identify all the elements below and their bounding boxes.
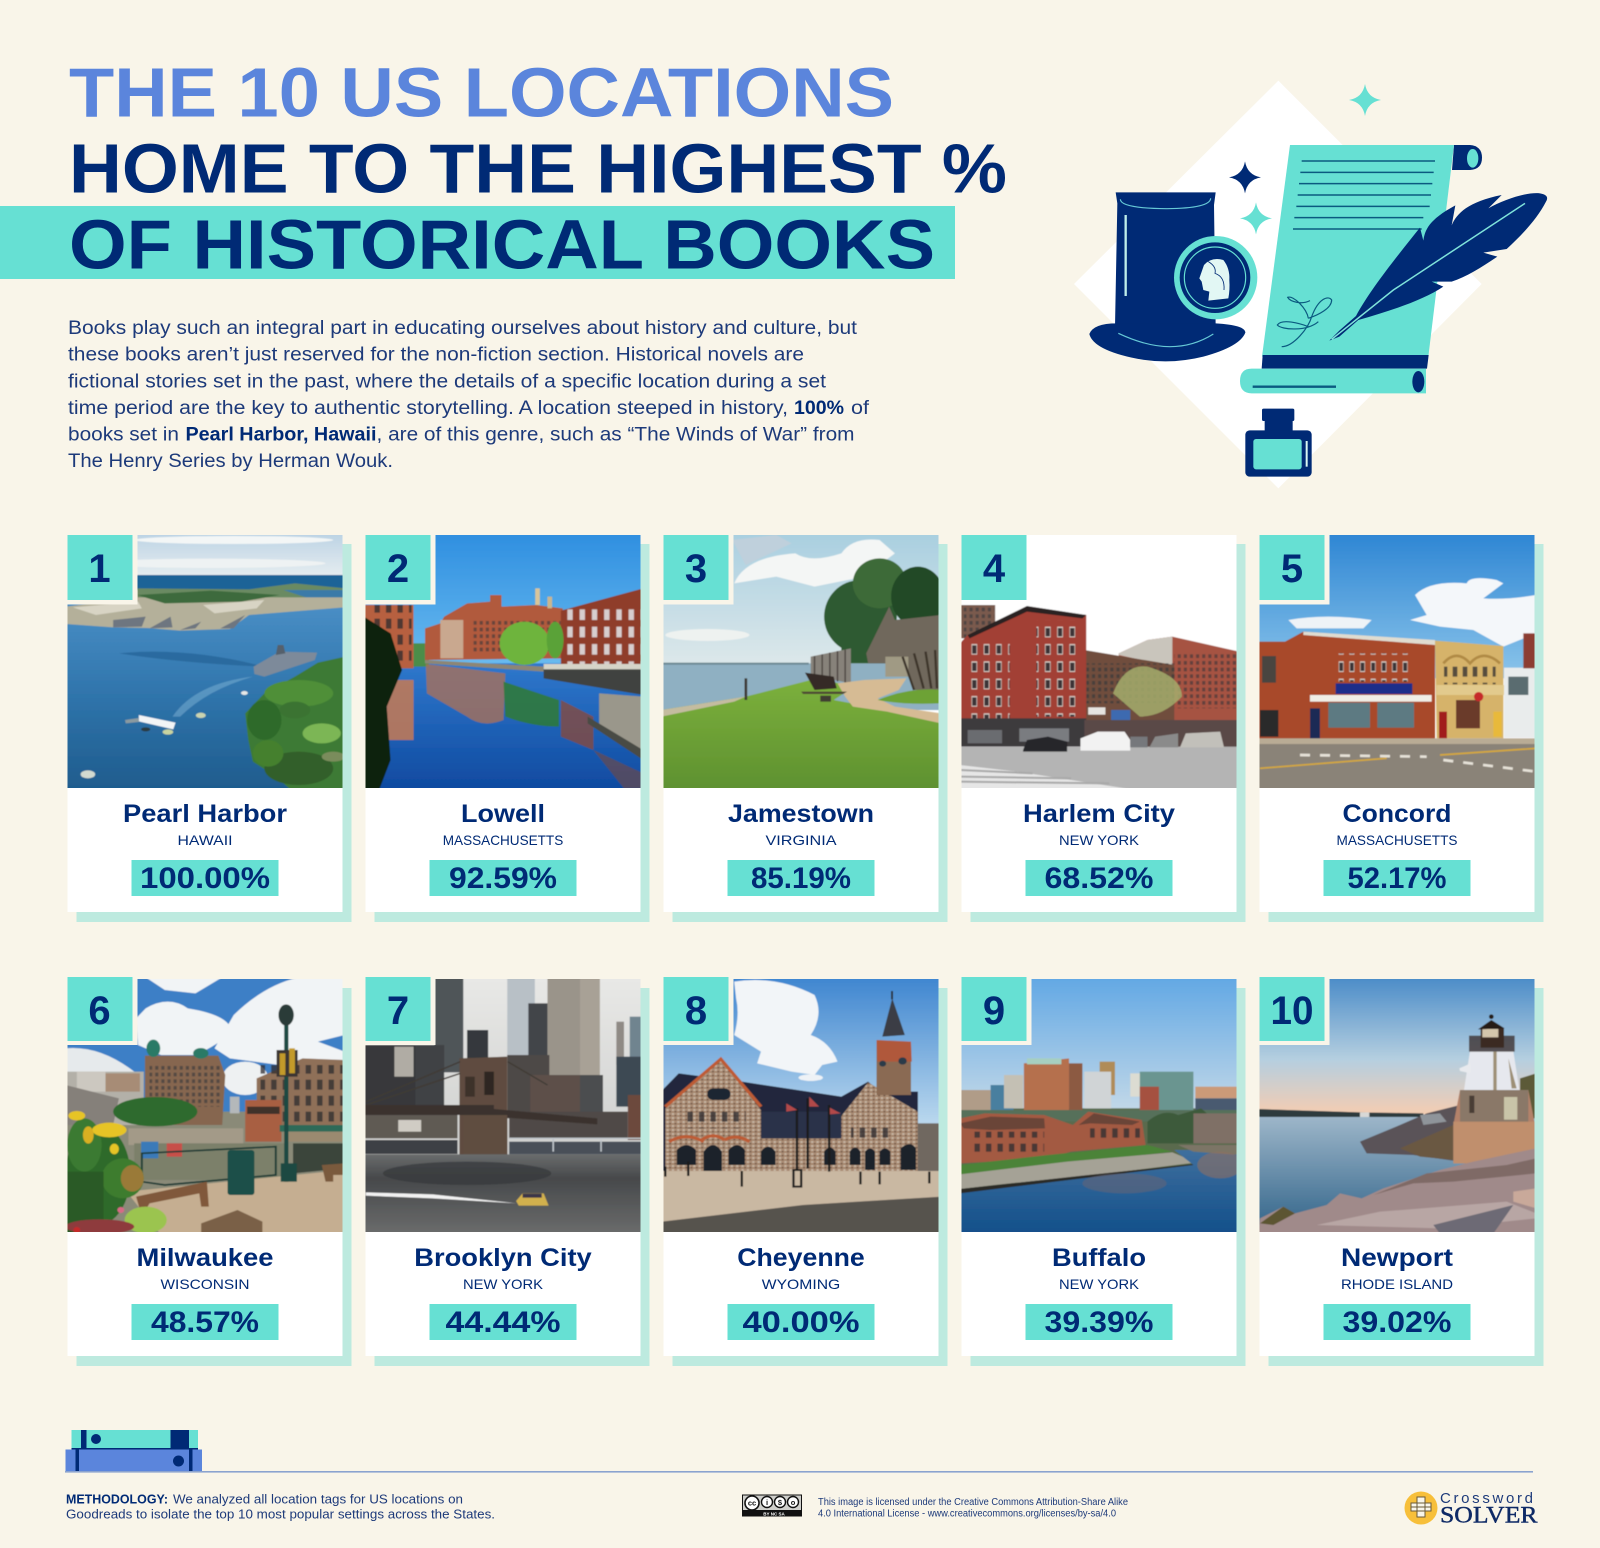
percentage pill — [728, 860, 874, 896]
card 7: Brooklyn City — [364, 977, 650, 1366]
footer line — [65, 1471, 1533, 1473]
rank badge 5 — [1260, 535, 1330, 604]
card 10: Newport — [1258, 977, 1544, 1366]
percentage pill — [1026, 860, 1172, 896]
city label: Concord — [1342, 800, 1452, 828]
icon: stacked books — [66, 1430, 202, 1471]
logo: Crossword Solver — [1404, 1490, 1538, 1528]
rank badge 4: 4 — [983, 547, 1006, 591]
rank badge 6 — [68, 977, 138, 1045]
percentage pill: 52.17% — [1348, 862, 1446, 895]
intro text block: fictional stories set in the past, where the details of a specific location during a set — [68, 371, 827, 392]
card 9: Buffalo — [960, 977, 1246, 1366]
state label: VIRGINIA — [766, 832, 837, 848]
rank badge 8 — [664, 977, 734, 1045]
intro text block — [68, 318, 870, 472]
city label: Pearl Harbor — [123, 800, 287, 828]
percentage pill — [1324, 1304, 1470, 1340]
title — [0, 54, 1007, 284]
percentage pill: 92.59% — [449, 862, 557, 895]
intro text block: these books aren’t just reserved for the non-fiction section. Historical novels are — [68, 345, 804, 366]
card 2: Lowell — [364, 533, 650, 922]
rank badge 1: 1 — [88, 547, 111, 591]
logo: Crossword Solver: SOLVER — [1440, 1503, 1538, 1528]
icon: ink bottle — [1245, 409, 1312, 477]
rank badge 2: 2 — [387, 547, 409, 591]
icon: creative commons badge: o — [791, 1498, 796, 1507]
intro text block: 100% — [794, 398, 844, 419]
icon: creative commons badge — [742, 1495, 802, 1516]
percentage pill: 39.39% — [1044, 1306, 1154, 1339]
illustration: hat, scroll, quill, ink — [1074, 80, 1548, 488]
methodology text: METHODOLOGY: — [66, 1492, 168, 1506]
intro text block: books set in — [68, 425, 179, 446]
rank badge 1 — [68, 535, 138, 604]
percentage pill — [1026, 1304, 1172, 1340]
icon: sparkles — [1229, 84, 1381, 234]
licence text: This image is licensed under the Creative Commons Attribution-Share Alike — [818, 1497, 1128, 1508]
intro text block: Pearl Harbor, Hawaii — [186, 425, 376, 446]
card 1: Pearl Harbor — [65, 533, 352, 922]
rank badge 10 — [1260, 977, 1330, 1045]
white diamond — [1074, 81, 1482, 488]
state label: RHODE ISLAND — [1341, 1276, 1453, 1292]
photo: Lowell — [366, 535, 640, 788]
photo: Brooklyn City — [366, 979, 640, 1232]
title: THE 10 US LOCATIONS — [69, 54, 894, 132]
city label: Newport — [1341, 1244, 1454, 1272]
percentage pill: 39.02% — [1342, 1306, 1452, 1339]
icon: top hat — [1089, 192, 1257, 361]
state label: NEW YORK — [1059, 1276, 1140, 1292]
percentage pill: 40.00% — [742, 1306, 860, 1339]
percentage pill — [430, 860, 576, 896]
licence text — [818, 1497, 1128, 1520]
title: HOME TO THE HIGHEST % — [69, 130, 1007, 208]
state label: WYOMING — [762, 1276, 840, 1292]
rank badge 9: 9 — [983, 989, 1005, 1033]
title: OF HISTORICAL BOOKS — [69, 206, 935, 284]
percentage pill — [430, 1304, 576, 1340]
photo: Cheyenne — [664, 979, 938, 1232]
card 8: Cheyenne — [661, 977, 948, 1366]
percentage pill: 100.00% — [140, 862, 270, 895]
city label: Harlem City — [1023, 800, 1175, 828]
state label: WISCONSIN — [160, 1276, 250, 1292]
percentage pill: 85.19% — [751, 862, 851, 895]
card 3: Jamestown — [661, 533, 948, 922]
city label: Brooklyn City — [414, 1244, 592, 1272]
rank badge 6: 6 — [88, 989, 111, 1033]
percentage pill: 44.44% — [446, 1306, 560, 1339]
intro text block: , are of this genre, such as “The Winds of War” from — [376, 425, 854, 446]
rank badge 9 — [962, 977, 1032, 1045]
state label: NEW YORK — [1059, 832, 1140, 848]
rank badge 4 — [962, 535, 1032, 604]
card 5: Concord — [1258, 533, 1544, 922]
rank badge 10: 10 — [1270, 989, 1314, 1033]
city label: Buffalo — [1052, 1244, 1146, 1272]
rank badge 2 — [366, 535, 436, 604]
state label: HAWAII — [178, 832, 232, 848]
rank badge 8: 8 — [685, 989, 707, 1033]
percentage pill: 48.57% — [151, 1306, 259, 1339]
intro text block: Books play such an integral part in educating ourselves about history and culture, but — [68, 318, 858, 339]
rank badge 7: 7 — [387, 989, 409, 1033]
photo: Jamestown — [664, 535, 938, 788]
rank badge 5: 5 — [1281, 547, 1303, 591]
intro text block: time period are the key to authentic storytelling. A location steeped in history, — [68, 398, 788, 419]
percentage pill — [1324, 860, 1470, 896]
icon: scroll — [1240, 145, 1482, 393]
icon: creative commons badge: i — [766, 1498, 768, 1507]
percentage pill — [728, 1304, 874, 1340]
icon: creative commons badge: $ — [778, 1498, 783, 1507]
card 4: Harlem City — [960, 533, 1246, 922]
photo: Pearl Harbor — [68, 535, 342, 788]
methodology text: We analyzed all location tags for US locations on — [173, 1492, 463, 1506]
photo: Harlem City — [962, 604, 1236, 788]
percentage pill: 68.52% — [1044, 862, 1154, 895]
intro text block: The Henry Series by Herman Wouk. — [68, 451, 393, 472]
photo: Buffalo — [962, 979, 1236, 1232]
percentage pill — [132, 1304, 278, 1340]
intro text block: of — [851, 398, 870, 419]
photo: Concord — [1260, 535, 1534, 788]
rank badge 7 — [366, 977, 436, 1045]
photo: Newport — [1260, 979, 1534, 1232]
state label: NEW YORK — [463, 1276, 544, 1292]
methodology text — [66, 1492, 495, 1522]
icon: creative commons badge: BY NC SA — [763, 1511, 785, 1516]
rank badge 3: 3 — [685, 547, 707, 591]
icon: creative commons badge: cc — [748, 1498, 756, 1508]
licence text: 4.0 International License - www.creativecommons.org/licenses/by-sa/4.0 — [818, 1508, 1116, 1520]
city label: Cheyenne — [737, 1244, 865, 1272]
methodology text: Goodreads to isolate the top 10 most popular settings across the States. — [66, 1508, 495, 1522]
state label: MASSACHUSETTS — [1336, 832, 1458, 848]
rank badge 3 — [664, 535, 734, 604]
icon: quill — [1329, 193, 1547, 341]
photo: Milwaukee — [68, 979, 342, 1232]
state label: MASSACHUSETTS — [443, 832, 563, 848]
city label: Milwaukee — [136, 1244, 274, 1272]
city label: Jamestown — [728, 800, 874, 828]
card 6: Milwaukee — [65, 977, 352, 1366]
logo: Crossword Solver: Crossword — [1440, 1490, 1533, 1507]
city label: Lowell — [461, 800, 545, 828]
